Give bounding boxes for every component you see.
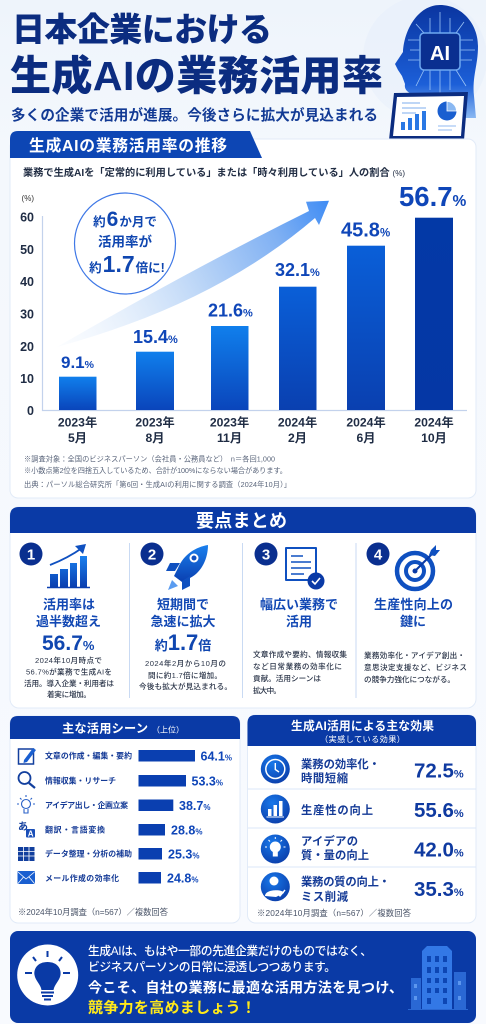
bar: 2024年2月: 2024年 [278, 415, 317, 430]
point 3 [253, 542, 347, 695]
bar: 2023年11月: 2023年 [210, 415, 249, 430]
point 4: 意思決定支援など、ビジネス [364, 662, 467, 672]
bar: 2023年8月: 8月 [146, 431, 164, 445]
use scenes header: （上位） [152, 725, 184, 735]
survey notes: ※小数点第2位を四捨五入しているため、合計が100%にならない場合があります。 [24, 466, 287, 475]
bar: 2024年10月: 2024年 [414, 415, 454, 430]
illustration: AI head and tablet: AI [430, 43, 450, 65]
bar: 2024年10月 [399, 181, 467, 445]
point 1: 1 [27, 546, 35, 564]
effect: quality [261, 872, 464, 904]
row: writing: 文章の作成・編集・要約 [45, 750, 132, 760]
bar: 2024年2月: 2月 [288, 431, 307, 445]
point 3: 幅広い業務で [260, 597, 338, 612]
bar: 2023年11月: 11月 [217, 431, 242, 445]
point 1: 56.7%が業務で生成AIを [26, 666, 112, 676]
bar: 2024年2月 [275, 260, 320, 445]
icon: light bulb [17, 944, 78, 1006]
bar: 2024年6月: 6月 [357, 431, 375, 445]
y axis: 60 [20, 210, 34, 224]
point 1: 56.7% [42, 632, 95, 655]
icon: translate: A [28, 830, 34, 838]
conclusion text [88, 944, 403, 1017]
row: email [18, 871, 198, 886]
bar: 2023年8月: 2023年 [135, 415, 175, 430]
effect: productivity: 55.6% [414, 799, 464, 822]
row: email: メール作成の効率化 [45, 873, 119, 883]
bar: 2024年6月: 2024年 [346, 415, 386, 430]
row: ideas: アイデア出し・企画立案 [45, 800, 128, 810]
bar: 2024年10月: 56.7% [399, 181, 467, 212]
point 1: 着実に増加。 [47, 689, 91, 699]
effect: quality: 35.3% [414, 878, 464, 901]
conclusion text: 競争力を高めましょう！ [88, 1000, 256, 1017]
survey notes: 出典：パーソル総合研究所「第6回・生成AIの利用に関する調査（2024年10月）」 [24, 480, 291, 489]
point 4: 4 [374, 546, 383, 564]
row: data analysis [18, 847, 199, 862]
icon: person check [261, 872, 290, 901]
title: 生成AIの業務活用率 [10, 53, 383, 99]
row: writing: 64.1% [200, 750, 232, 764]
use scenes header [10, 716, 240, 739]
icon: translate [18, 821, 35, 838]
point 1: 活用。導入企業・利用者は [24, 678, 114, 688]
icon: pencil note [18, 748, 36, 764]
point 2 [139, 542, 232, 691]
y axis: (%) [22, 194, 34, 203]
point 2: 2 [148, 546, 156, 564]
use scenes header: 主な活用シーン [62, 721, 148, 736]
row: translation: 翻訳・言語変換 [45, 824, 105, 834]
icon: translate: あ [18, 821, 28, 833]
row: data analysis: 25.3% [168, 848, 199, 862]
effect: ideas: 42.0% [414, 839, 464, 862]
bar: 2023年5月: 5月 [68, 431, 87, 445]
title: 日本企業における [12, 11, 272, 48]
row: data analysis: データ整理・分析の補助 [45, 848, 132, 858]
effect: productivity: 生産性の向上 [301, 803, 373, 817]
point 3: 拡大中。 [253, 685, 281, 695]
callout: 1.7x in 6 months: 約6か月で [93, 208, 157, 231]
effect: time saving: 時間短縮 [301, 771, 348, 785]
effect: quality: 業務の質の向上・ [301, 875, 390, 889]
panel: main effects [248, 715, 476, 923]
key points header: 要点まとめ [196, 511, 287, 531]
point 4: 生産性向上の [374, 597, 453, 612]
effect: time saving [261, 754, 464, 785]
icon: clock [261, 754, 290, 784]
bar: 2024年6月: 45.8% [341, 220, 390, 242]
y axis: 10 [20, 372, 34, 386]
icon: rocket [166, 545, 208, 590]
point 2: 急速に拡大 [150, 614, 216, 629]
y axis: 30 [20, 308, 34, 322]
point 3: 活用 [286, 614, 312, 629]
growth arrow [57, 201, 329, 347]
effects header [248, 715, 476, 746]
point 4: 業務効率化・アイデア創出・ [364, 650, 465, 660]
y axis [20, 194, 467, 418]
section tab: 生成AIの業務活用率の推移 [29, 136, 227, 155]
effect: quality: ミス削減 [301, 890, 349, 904]
effects header: 生成AI活用による主な効果 [291, 719, 434, 733]
icon: office buildings [408, 946, 468, 1010]
conclusion text: 生成AIは、もはや一部の先進企業だけのものではなく、 [88, 944, 372, 958]
bar: 2023年5月: 9.1% [61, 353, 95, 372]
point 3: 文章作成や要約、情報収集 [253, 649, 347, 659]
tablet [389, 92, 468, 140]
icon: light bulb [17, 795, 35, 813]
conclusion text: ビジネスパーソンの日常に浸透しつつあります。 [88, 960, 336, 974]
key points header [10, 507, 476, 533]
row: email: 24.8% [167, 872, 198, 886]
panel: trend chart [10, 131, 476, 498]
panel: main use scenes [10, 716, 240, 923]
survey notes: ※調査対象：全国のビジネスパーソン（会社員・公務員など） n＝各回1,000 [24, 455, 275, 464]
panel: conclusion banner [10, 931, 476, 1023]
icon: target and dart [397, 545, 440, 589]
callout: 1.7x in 6 months [74, 193, 176, 294]
effect: ideas [261, 834, 464, 864]
panel: key points [10, 507, 476, 708]
y axis: 20 [20, 340, 34, 354]
point 4 [364, 542, 467, 684]
y axis: 50 [20, 243, 34, 257]
effect: time saving: 業務の効率化・ [301, 757, 380, 771]
callout: 1.7x in 6 months: 活用率が [98, 234, 152, 250]
bar: 2024年10月: 10月 [421, 431, 447, 445]
row: ideas [17, 795, 210, 813]
y axis: 0 [27, 404, 34, 418]
point 1 [20, 542, 114, 699]
effect: time saving: 72.5% [414, 760, 464, 783]
row: translation: 28.8% [171, 824, 202, 838]
row: translation [18, 821, 202, 838]
effect: ideas: 質・量の向上 [301, 848, 369, 862]
icon: bars [261, 794, 290, 824]
callout: 1.7x in 6 months: 約1.7倍に! [89, 251, 165, 277]
effects header: （実感している効果） [320, 734, 405, 744]
row: research [18, 772, 223, 788]
bar: 2023年8月: 15.4% [133, 327, 178, 347]
section tab [10, 131, 262, 158]
point 2: 約1.7倍 [155, 630, 211, 655]
point 4: 鍵に [400, 614, 426, 629]
point 4: の競争力強化につながる。 [364, 674, 455, 684]
icon: rising bar chart [47, 544, 90, 588]
point 2: 短期間で [157, 597, 209, 612]
icon: bulb [261, 834, 290, 864]
icon: envelope [18, 871, 35, 884]
bar: 2023年5月: 2023年 [58, 415, 97, 430]
bar: 2023年11月: 21.6% [208, 301, 253, 321]
y axis: 40 [20, 275, 34, 289]
point 2: 今後も拡大が見込まれる。 [139, 681, 232, 691]
survey notes [24, 455, 291, 489]
icon: magnifier [18, 772, 35, 788]
footnote: ※2024年10月調査（n=567）／複数回答 [257, 908, 412, 918]
point 1: 2024年10月時点で [35, 655, 102, 665]
bar: 2023年11月 [208, 301, 253, 445]
row: research: 情報収集・リサーチ [45, 776, 116, 786]
row: ideas: 38.7% [179, 799, 210, 813]
title [10, 11, 383, 99]
point 3: 貢献。活用シーンは [253, 673, 321, 683]
bar: 2023年5月 [58, 353, 97, 445]
point 1: 過半数超え [36, 614, 101, 629]
effect: productivity [261, 794, 464, 824]
point 3: 3 [262, 546, 270, 564]
icon: document with check [286, 548, 324, 590]
row: writing [18, 748, 232, 764]
illustration: AI head and tablet [363, 0, 486, 120]
bar: 2024年6月 [341, 220, 390, 445]
subtitle: 多くの企業で活用が進展。今後さらに拡大が見込まれる [11, 106, 378, 124]
effect: ideas: アイデアの [301, 834, 358, 848]
icon: table [18, 847, 34, 861]
chart description: 業務で生成AIを「定常的に利用している」または「時々利用している」人の割合 (%) [23, 166, 405, 179]
point 3: など日常業務の効率化に [253, 661, 342, 671]
bar: 2023年8月 [133, 327, 178, 445]
footnote: ※2024年10月調査（n=567）／複数回答 [18, 907, 169, 917]
conclusion text: 今こそ、自社の業務に最適な活用方法を見つけ、 [88, 980, 403, 996]
bar: 2024年2月: 32.1% [275, 260, 320, 280]
point 2: 2024年2月から10月の [145, 658, 226, 668]
row: research: 53.3% [192, 774, 223, 788]
point 1: 活用率は [43, 597, 95, 612]
point 2: 間に約1.7倍に増加。 [148, 670, 222, 680]
